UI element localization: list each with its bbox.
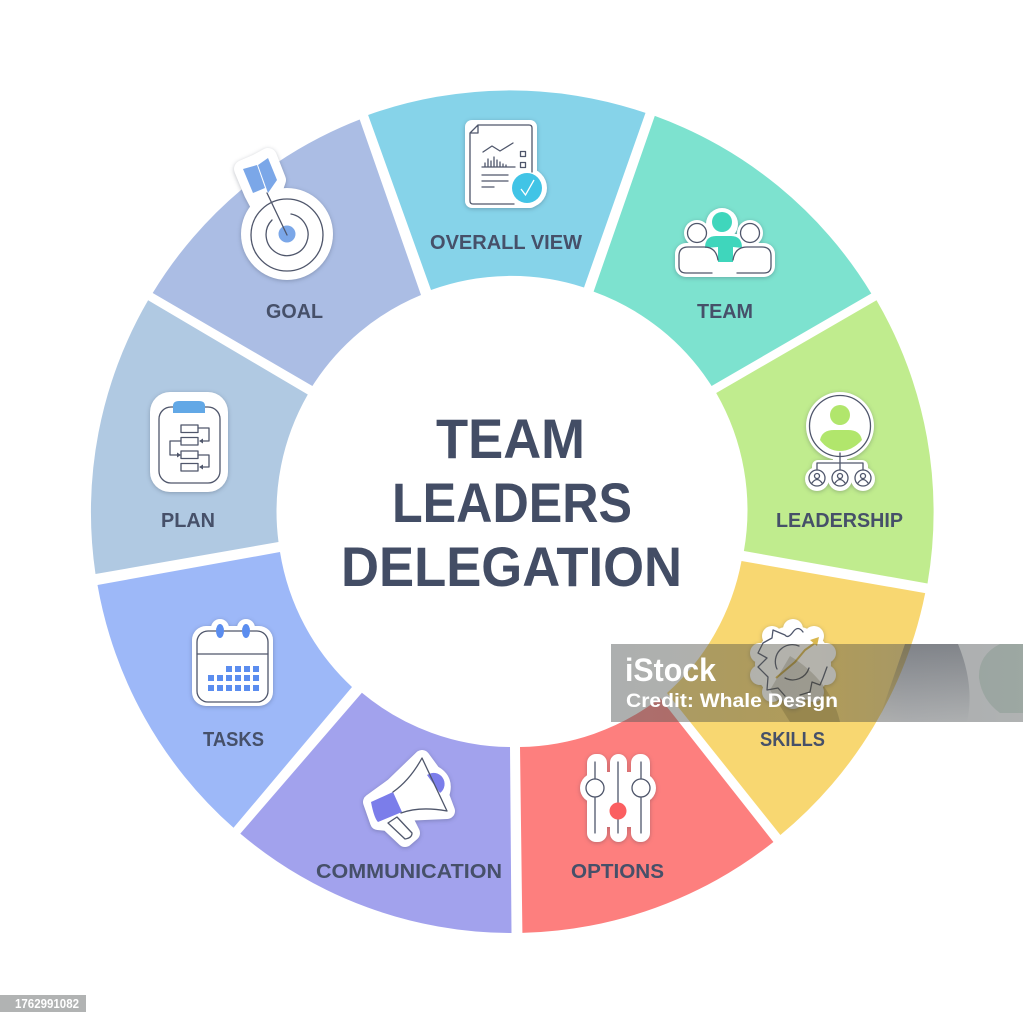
- label: team: TEAM: [697, 301, 753, 323]
- label: tasks: TASKS: [203, 729, 264, 751]
- image id tag: [0, 995, 86, 1012]
- label: communication: COMMUNICATION: [316, 861, 502, 883]
- label: skills: SKILLS: [760, 729, 825, 751]
- title: LEADERS: [392, 471, 632, 534]
- label: goal: GOAL: [266, 301, 323, 323]
- label: leadership: LEADERSHIP: [776, 510, 903, 532]
- panel: overall view: [368, 90, 646, 290]
- panel: goal: [153, 120, 421, 386]
- image id tag: 1762991082: [15, 997, 79, 1011]
- icon: sliders: [580, 754, 656, 842]
- title: DELEGATION: [341, 535, 682, 598]
- title: [341, 407, 682, 598]
- panel: skills: [667, 561, 925, 835]
- icon: clipboard flowchart: [150, 392, 228, 492]
- icon: report with check: [465, 120, 547, 208]
- panel: plan: [91, 300, 308, 574]
- panel: options: [520, 698, 773, 933]
- panel: leadership: [716, 300, 934, 584]
- label: overall view: OVERALL VIEW: [430, 232, 582, 254]
- icon: calendar: [192, 619, 273, 706]
- panel: communication: [240, 693, 512, 933]
- label: options: OPTIONS: [571, 861, 664, 883]
- icon: megaphone: [371, 758, 447, 839]
- icon: leader with org chart: [805, 392, 875, 491]
- panel: team: [594, 116, 871, 386]
- watermark band: [611, 644, 1023, 722]
- icon: target with dart: [241, 157, 333, 280]
- label: plan: PLAN: [161, 510, 215, 532]
- icon: team of three: [675, 208, 775, 277]
- watermark credit: Credit: Whale Design: [626, 691, 838, 712]
- title: TEAM: [436, 407, 585, 470]
- icon: gear with arrow: [750, 619, 836, 709]
- panel: tasks: [98, 552, 352, 828]
- watermark logo: iStock: [625, 652, 716, 688]
